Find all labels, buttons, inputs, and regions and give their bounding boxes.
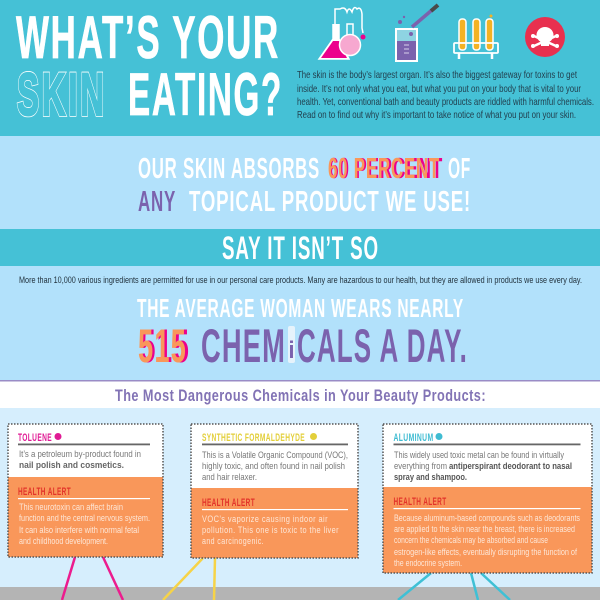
panel: synthetic formaldehyde: and hair relaxer. <box>202 472 257 483</box>
panel: toluene: HEALTH ALERT <box>18 486 71 498</box>
callout: 515 chemicals a day: CALS A DAY. <box>297 319 468 372</box>
panel: synthetic formaldehyde: and carcinogenic. <box>202 536 264 546</box>
callout: 515 chemicals a day: 515 <box>138 319 187 372</box>
panel: synthetic formaldehyde: pollution. This one is toxic to the liver <box>202 525 339 535</box>
panel: synthetic formaldehyde: VOC’s vaporize causing indoor air <box>202 514 328 524</box>
panel: synthetic formaldehyde <box>191 424 358 558</box>
callout: skin absorbs 60 percent: ANY <box>138 186 176 218</box>
title: WHAT’S YOUR <box>16 4 280 71</box>
panel: aluminum: everything from <box>394 461 447 472</box>
title: EATING? <box>128 61 283 128</box>
icon: test tubes <box>454 14 498 59</box>
heading: most dangerous chemicals: The Most Dangerous Chemicals in Your Beauty Products: <box>115 386 486 405</box>
panel: aluminum: spray and shampoo. <box>394 472 467 483</box>
icon: beaker and dropper <box>395 5 438 62</box>
panel: synthetic formaldehyde: HEALTH ALERT <box>202 497 255 509</box>
callout: skin absorbs 60 percent: OF <box>448 153 471 185</box>
callout: skin absorbs 60 percent <box>138 153 471 218</box>
callout: 515 chemicals a day: 515 <box>140 319 190 372</box>
connector lines <box>62 557 510 600</box>
panel: toluene: It can also interfere with normal fetal <box>19 525 139 535</box>
panel: synthetic formaldehyde: SYNTHETIC FORMALDEHYDE <box>202 432 305 444</box>
heading: say it isn't so: SAY IT ISN’T SO <box>222 230 379 266</box>
callout: 515 chemicals a day: CHEM <box>201 319 286 372</box>
callout: skin absorbs 60 percent: 60 PERCENT <box>328 153 440 185</box>
callout: skin absorbs 60 percent: OUR SKIN ABSORBS <box>138 153 320 185</box>
panel: toluene: function and the central nervous system. <box>19 513 150 523</box>
panel: aluminum <box>383 424 592 573</box>
icon: flasks <box>319 8 366 59</box>
panel: toluene: and childhood development. <box>19 536 108 546</box>
panel: toluene <box>8 424 163 557</box>
panel: aluminum: ALUMINUM <box>394 432 434 444</box>
title <box>16 4 283 128</box>
panel: synthetic formaldehyde: highly toxic, and often found in nail polish <box>202 461 345 472</box>
panel: aluminum: antiperspirant deodorant to nasal <box>449 461 572 472</box>
title: SKIN <box>17 61 107 128</box>
panel: toluene: TOLUENE <box>18 432 52 444</box>
title: SKIN <box>17 61 107 128</box>
text block: introduction <box>297 69 594 121</box>
panel: aluminum: the endocrine system. <box>394 558 462 568</box>
callout: 515 chemicals a day: i <box>288 337 294 364</box>
panel: toluene: nail polish and cosmetics. <box>19 460 124 471</box>
callout: 515 chemicals a day <box>137 293 468 372</box>
panel: synthetic formaldehyde: This is a Volatile Organic Compound (VOC), <box>202 450 348 461</box>
panel: toluene: It’s a petroleum by-product found in <box>19 449 141 460</box>
panel: toluene: This neurotoxin can affect brain <box>19 502 123 512</box>
panel: aluminum: concern the chemicals may be absorbed and cause <box>394 535 548 545</box>
icon: skull and crossbones <box>525 17 565 57</box>
callout: skin absorbs 60 percent: 60 PERCENT <box>329 153 443 185</box>
panel: aluminum: HEALTH ALERT <box>394 496 446 508</box>
